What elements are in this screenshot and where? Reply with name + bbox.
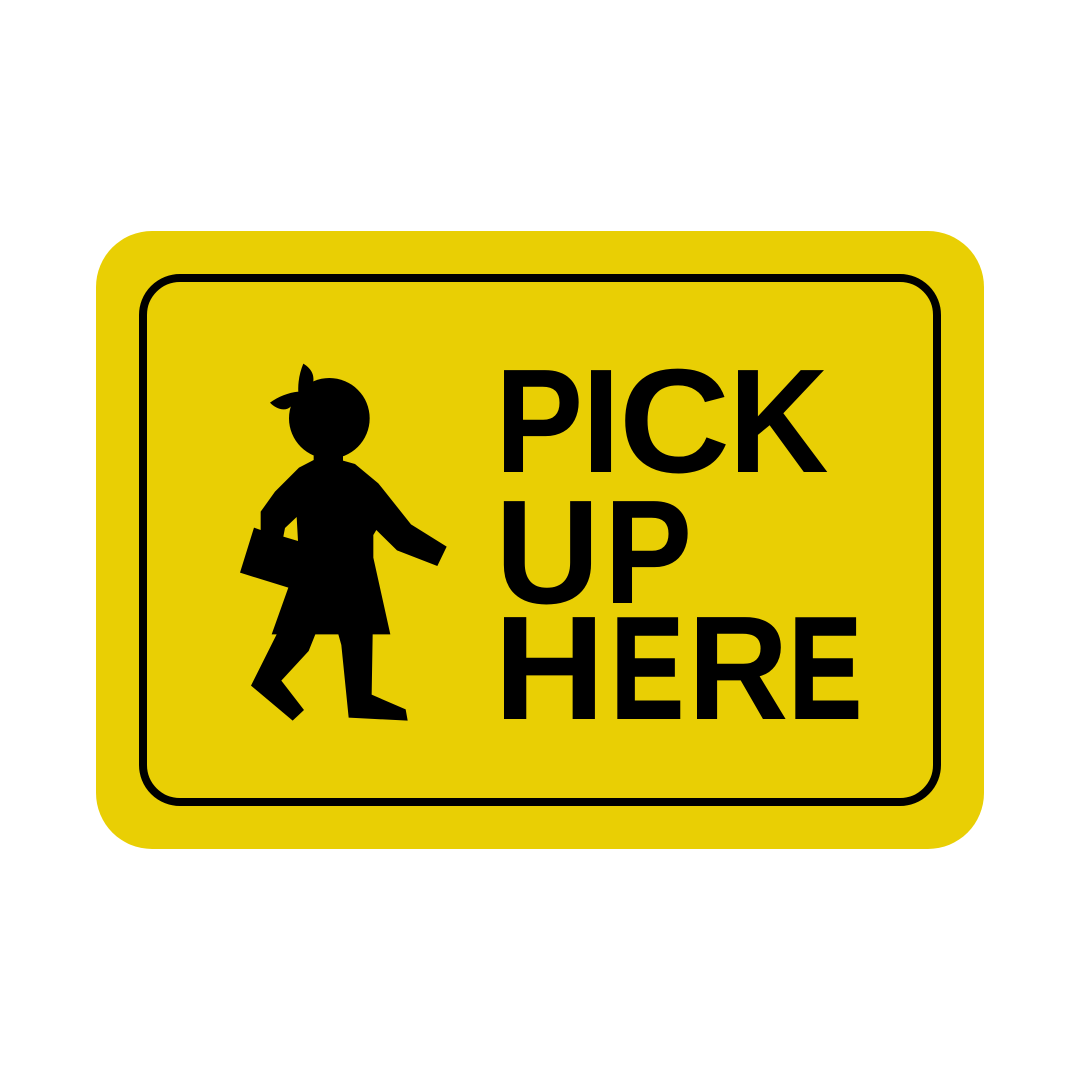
- heading: PICK: C: [619, 338, 730, 503]
- heading: HERE: [494, 586, 862, 751]
- girl hair bow: [270, 364, 313, 409]
- heading: HERE: H: [494, 586, 605, 751]
- icon: girl walking with bag: [240, 364, 447, 721]
- heading: UP: P: [604, 469, 692, 635]
- heading: HERE: E: [789, 588, 862, 749]
- girl body and bag: [240, 456, 447, 721]
- girl head: [289, 378, 370, 459]
- heading: HERE: R: [688, 586, 788, 751]
- heading: UP: U: [495, 470, 600, 635]
- sign inner border: [143, 278, 937, 802]
- heading: PICK: I: [582, 339, 620, 504]
- heading: PICK: [495, 338, 829, 504]
- heading: PICK: K: [729, 339, 829, 504]
- heading: PICK: P: [495, 338, 583, 504]
- heading: HERE: E: [611, 588, 684, 749]
- panel: yellow sign: [96, 231, 984, 849]
- heading: UP: [495, 469, 692, 635]
